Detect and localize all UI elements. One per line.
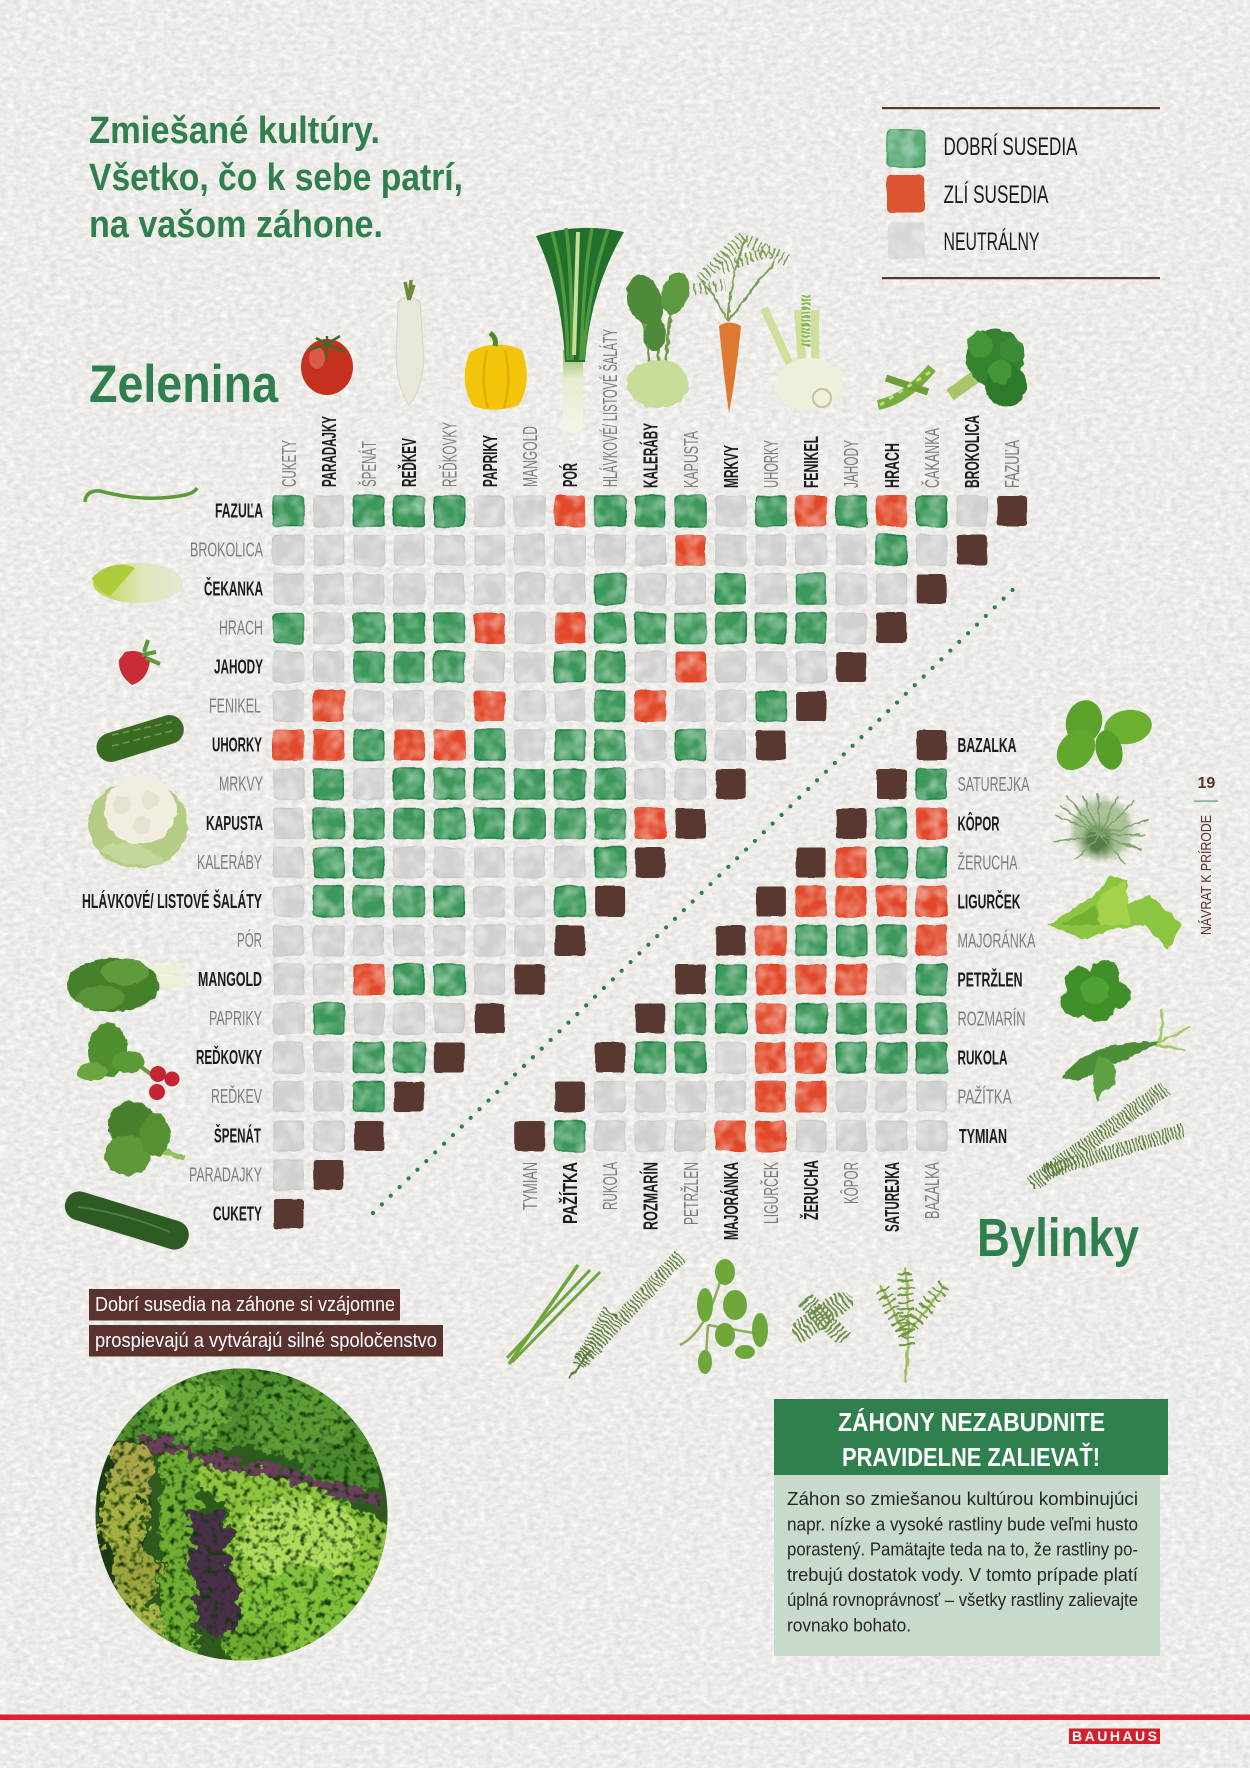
herb column labels: ROZMARÍN <box>640 1162 662 1230</box>
herb compatibility grid <box>555 769 947 1151</box>
icon: carrot <box>695 235 790 413</box>
herb column labels: PETRŽLEN <box>680 1162 703 1225</box>
vegetable row labels: BROKOLICA <box>190 540 263 562</box>
vegetable column labels: PAPRIKY <box>480 435 502 487</box>
row: Fenikel <box>274 691 786 721</box>
vegetable row labels: ČEKANKA <box>204 576 263 600</box>
callout: good neighbours banner: Dobrí susedia na záhone si vzájomne <box>95 1294 395 1316</box>
vegetable row labels: HLÁVKOVÉ/ LISTOVÉ ŠALÁTY <box>82 889 262 913</box>
row: Mangold <box>274 964 504 994</box>
vegetable row labels: UHORKY <box>212 734 262 756</box>
icon: radishes <box>77 1023 180 1100</box>
herb column labels: RUKOLA <box>600 1162 622 1210</box>
row: Paradajky <box>274 1160 304 1190</box>
heading: Zelenina: Zelenina <box>89 355 278 414</box>
vegetable column labels: CUKETY <box>279 440 301 487</box>
panel body text: porastený. Pamätajte teda na to, že rastliny po- <box>787 1539 1138 1560</box>
logo: Bauhaus: BAUHAUS <box>1072 1728 1157 1744</box>
herb column labels: PAŽÍTKA <box>558 1162 582 1224</box>
footer red line <box>0 1714 1250 1720</box>
vegetable column labels: KAPUSTA <box>681 431 703 488</box>
row: Papriky <box>274 1004 464 1034</box>
herb column labels: TYMIAN <box>520 1162 542 1210</box>
icon: endive <box>92 563 183 603</box>
title: Všetko, čo k sebe patrí, <box>89 157 463 199</box>
legend label: bad: ZLÍ SUSEDIA <box>944 180 1049 209</box>
herb column labels: MAJORÁNKA <box>720 1162 743 1240</box>
vegetable column labels: POŔ <box>559 463 582 487</box>
herb column labels: KÔPOR <box>840 1162 863 1204</box>
page number and section tag: 19 <box>1198 775 1215 792</box>
panel body background <box>774 1475 1160 1656</box>
row: Špenát <box>274 1121 344 1151</box>
page number and section tag: NÁVRAT K PRÍRODE <box>1198 815 1215 935</box>
row: Brokolica <box>274 535 947 565</box>
row: Ligurček <box>796 886 947 916</box>
panel body text: úplná rovnoprávnosť – všetky rastliny zalievajte <box>787 1589 1138 1610</box>
vegetable column labels: KALERÁBY <box>640 423 662 488</box>
icon: chives <box>507 1265 600 1364</box>
row: Petržlen <box>716 964 947 994</box>
vegetable row labels: FAZUĽA <box>215 500 263 522</box>
icon: savory <box>880 1268 945 1383</box>
icon: zucchini <box>61 1188 192 1253</box>
herb column labels: LIGURČEK <box>760 1162 783 1224</box>
icon: rosemary sprig <box>1032 1088 1185 1184</box>
icon: spinach <box>105 1101 184 1175</box>
icon: yellow pepper <box>465 333 527 410</box>
page number and section tag <box>1194 775 1218 935</box>
diagonal brown self cells <box>274 496 1027 1229</box>
heading: Bylinky: Bylinky <box>977 1208 1139 1268</box>
icon: broccoli <box>950 329 1027 406</box>
legend swatch: bad neighbours <box>887 175 925 213</box>
icon: lovage <box>1047 875 1182 950</box>
legend label: good: DOBRÍ SUSEDIA <box>944 132 1078 161</box>
vegetable row labels: KALERÁBY <box>197 851 262 874</box>
legend swatch: neutral <box>887 222 925 259</box>
icon: strawberry <box>119 640 160 685</box>
icon: kohlrabi <box>620 268 693 408</box>
vegetable row labels: KAPUSTA <box>206 813 263 835</box>
herb column labels: BAZALKA <box>922 1162 944 1219</box>
vegetable row labels: HRACH <box>219 618 263 640</box>
vegetable column labels: HLÁVKOVÉ/ LISTOVÉ ŠALÁTY <box>599 329 622 487</box>
vegetable row labels: CUKETY <box>213 1204 262 1226</box>
icon: oregano <box>680 1259 768 1374</box>
row: Hlávkové šaláty <box>274 886 585 916</box>
vegetable row labels: PÓR <box>237 929 262 952</box>
bottom herbs illustrations <box>507 1256 945 1383</box>
vegetable column labels: UHORKY <box>761 440 783 488</box>
row: Žerucha <box>836 848 947 878</box>
herb row labels: SATUREJKA <box>958 774 1030 796</box>
icon: parsley <box>1061 960 1131 1022</box>
panel body text: trebujú dostatok vody. V tomto prípade platí <box>787 1564 1139 1585</box>
row: Rozmarín <box>676 1004 947 1034</box>
vegetable column labels: BROKOLICA <box>962 415 984 488</box>
panel: watering tip <box>774 1399 1168 1656</box>
icon: fennel <box>764 295 842 410</box>
vegetable compatibility grid <box>274 496 987 1190</box>
row: Fazuľa <box>274 496 987 526</box>
row: Saturejka <box>917 769 947 799</box>
herb row labels: LIGURČEK <box>958 890 1021 914</box>
panel heading text: PRAVIDELNE ZALIEVAŤ! <box>842 1442 1100 1472</box>
title: Zmiešané kultúry. <box>89 110 380 152</box>
row: Uhorky <box>274 730 746 760</box>
icon: chard <box>67 958 184 1012</box>
vegetable column labels: FENIKEL <box>801 436 823 488</box>
row: Rukola <box>635 1042 947 1072</box>
vegetable row labels: REĎKEV <box>211 1085 262 1108</box>
icon: arugula <box>1062 1008 1190 1102</box>
herb row labels: TYMIAN <box>959 1126 1007 1148</box>
vegetable row labels: MRKVY <box>219 774 263 796</box>
herb column labels: SATUREJKA <box>882 1162 904 1232</box>
icon: dill <box>1053 793 1148 864</box>
icon: cucumber <box>93 711 187 766</box>
vegetable column labels: REĎKEV <box>397 438 421 487</box>
panel heading text: ZÁHONY NEZABUDNITE <box>838 1407 1105 1437</box>
herb row labels: PAŽÍTKA <box>958 1086 1012 1108</box>
vegetable column labels: MANGOLD <box>520 426 542 487</box>
vegetable row labels: PAPRIKY <box>209 1008 262 1030</box>
callout: good neighbours banner <box>89 1289 443 1356</box>
row: Kapusta <box>274 808 665 838</box>
vegetable column labels: REĎKOVKY <box>438 422 462 487</box>
herb row labels: ROZMARÍN <box>958 1008 1026 1030</box>
vegetable column labels: HRACH <box>882 443 904 488</box>
herb column labels <box>520 1160 944 1240</box>
vegetable row labels: JAHODY <box>214 656 263 678</box>
row: Tymian <box>555 1121 947 1151</box>
vegetable row labels: PARADAJKY <box>189 1164 262 1186</box>
row: Pór <box>274 926 545 956</box>
vegetable column labels: ČAKANKA <box>921 428 944 488</box>
herb row labels <box>958 735 1036 1148</box>
herb row labels: ŽERUCHA <box>958 852 1018 874</box>
vegetable column labels: ŠPENÁT <box>358 441 381 487</box>
vegetable row labels: FENIKEL <box>209 696 261 718</box>
panel heading text <box>838 1407 1105 1472</box>
row: Kôpor <box>876 808 947 838</box>
herb row labels: RUKOLA <box>958 1048 1008 1070</box>
callout: good neighbours banner: prospievajú a vytvárajú silné spoločenstvo <box>95 1330 437 1352</box>
row: Kaleráby <box>274 848 625 878</box>
icon: cauliflower <box>88 776 188 868</box>
row: Čekanka <box>274 574 906 604</box>
herb row labels: KÔPOR <box>958 812 1000 836</box>
herb column labels: ŽERUCHA <box>799 1160 823 1220</box>
legend swatch: good neighbours <box>887 130 925 167</box>
herb row labels: MAJORÁNKA <box>958 930 1036 952</box>
right herbs illustrations <box>1032 696 1190 1184</box>
vegetable column labels <box>279 329 1024 488</box>
vegetable column labels: MRKVY <box>721 445 743 488</box>
row: Reďkev <box>274 1082 384 1112</box>
panel body text: napr. nízke a vysoké rastliny bude veľmi husto <box>787 1513 1138 1534</box>
row: Hrach <box>274 613 866 643</box>
vegetable column labels: JAHODY <box>841 440 863 488</box>
icon: green bean <box>85 488 197 502</box>
vegetable row labels: MANGOLD <box>198 969 262 991</box>
legend label: neutral: NEUTRÁLNY <box>944 227 1040 256</box>
herb row labels: BAZALKA <box>958 735 1016 757</box>
legend <box>882 107 1160 279</box>
icon: rosemary <box>570 1256 680 1378</box>
icon: thyme <box>795 1295 850 1340</box>
icon: peas <box>878 368 932 405</box>
herb row labels: PETRŽLEN <box>958 968 1022 992</box>
panel heading background <box>774 1399 1168 1475</box>
icon: leek <box>536 228 624 433</box>
dotted diagonal divider <box>373 589 1014 1213</box>
vegetable column labels: PARADAJKY <box>319 416 341 487</box>
vegetable column labels: FAZUĽA <box>1002 440 1024 488</box>
panel body text <box>787 1488 1139 1636</box>
row: Mrkvy <box>274 769 706 799</box>
vegetable row labels <box>82 500 263 1226</box>
vegetable row labels: REĎKOVKY <box>196 1045 262 1069</box>
vegetable row labels: ŠPENÁT <box>214 1124 261 1148</box>
left vegetables illustrations <box>61 488 197 1253</box>
row: Reďkovky <box>274 1042 424 1072</box>
panel body text: Záhon so zmiešanou kultúrou kombinujúci <box>787 1488 1138 1509</box>
row: Majoránka <box>756 926 947 956</box>
photo: mixed culture garden bed <box>90 1360 395 1670</box>
top vegetables illustrations <box>301 228 1027 433</box>
icon: tomato <box>301 336 353 395</box>
title: na vašom záhone. <box>89 204 383 246</box>
title <box>89 110 463 246</box>
panel body text: rovnako bohato. <box>787 1614 911 1636</box>
icon: basil <box>1049 696 1155 778</box>
row: Pažítka <box>595 1082 947 1112</box>
row: Jahody <box>274 652 826 682</box>
icon: white radish <box>396 280 424 405</box>
